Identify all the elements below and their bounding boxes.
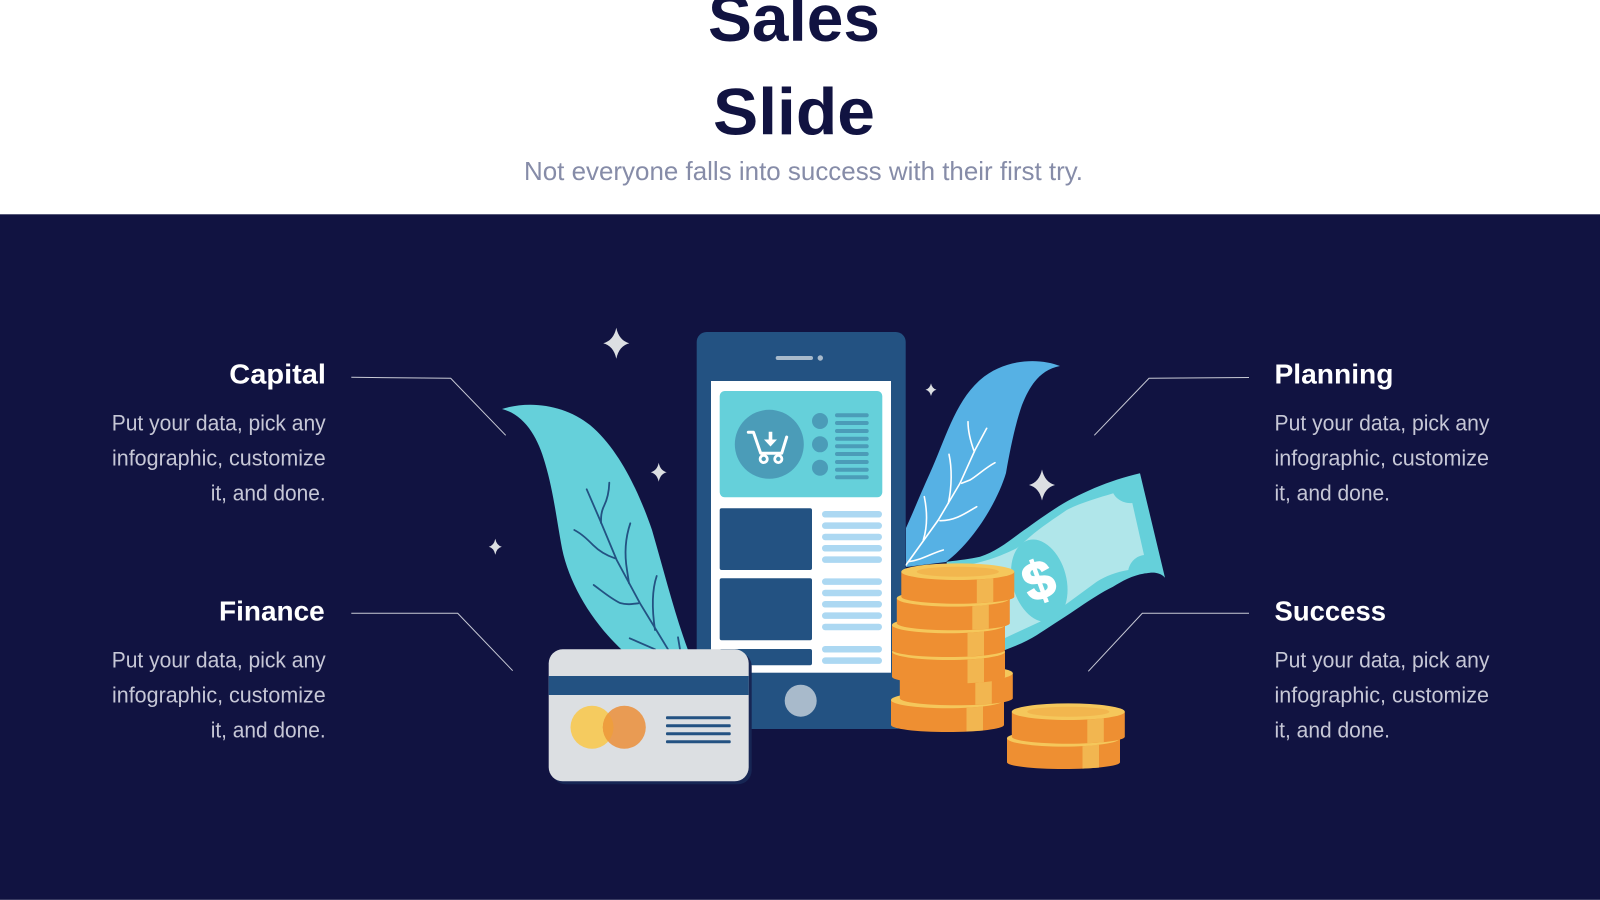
coin 4 (892, 643, 1005, 684)
text block: Planning (1274, 358, 1490, 506)
screen (711, 381, 891, 673)
text block: Success: infographic, customize (1274, 682, 1489, 707)
text block: Planning: Put your data, pick any (1274, 411, 1490, 436)
text block: Finance: Put your data, pick any (112, 647, 326, 672)
icon: large sparkle right (1029, 470, 1055, 500)
icon: shopping cart (748, 432, 787, 463)
bottom edge line (0, 899, 1600, 900)
title: Slide (713, 74, 875, 148)
magnetic stripe (549, 676, 749, 695)
list row 3 (720, 646, 882, 665)
subtitle: Not everyone falls into success with their first try. (524, 156, 1083, 186)
coin 7 (1012, 703, 1125, 744)
text block: Capital: Put your data, pick any (112, 411, 326, 436)
panel: dark background band (0, 214, 1600, 900)
dollar medallion (1002, 533, 1076, 628)
illustration: left teal leaf (502, 405, 688, 650)
speaker (776, 355, 823, 361)
icon: medium sparkle (651, 463, 667, 482)
illustration: smartphone (697, 332, 906, 729)
shopping banner (720, 391, 882, 497)
text block: Planning: it, and done. (1274, 481, 1390, 506)
illustration: main coin stack (891, 563, 1014, 732)
text block: Success: Put your data, pick any (1274, 647, 1490, 672)
text block: Capital (112, 358, 326, 506)
icon: small sparkle left (489, 539, 502, 555)
text block: Finance: it, and done. (211, 717, 326, 742)
text block: Capital: it, and done. (211, 481, 326, 506)
connector: Capital (351, 377, 506, 435)
illustration: banknote (947, 473, 1165, 650)
text block: Success: it, and done. (1274, 717, 1390, 742)
coin 3 (892, 617, 1005, 657)
list row 2 (720, 578, 882, 640)
connector: Finance (351, 613, 513, 671)
text block: Success (1274, 596, 1490, 742)
dollar medallion: $ (1014, 548, 1063, 614)
coin 8 (1007, 730, 1120, 769)
icon: small sparkle right (926, 383, 936, 396)
coin 1 (901, 563, 1014, 604)
phone body (697, 332, 906, 729)
text block: Success: Success (1274, 596, 1386, 627)
card logo (570, 706, 646, 749)
text block: Planning: infographic, customize (1274, 445, 1489, 470)
text block: Planning: Planning (1274, 358, 1394, 389)
text block: Finance: infographic, customize (112, 682, 326, 707)
coin 2 (897, 590, 1010, 630)
text block: Finance (112, 596, 326, 742)
title (708, 0, 880, 148)
home button (785, 685, 817, 717)
list row 1 (720, 508, 882, 570)
illustration: small coin stack (1007, 703, 1125, 769)
icon: large sparkle top left (603, 328, 629, 359)
card text lines (666, 716, 731, 743)
text block: Capital: Capital (229, 358, 326, 389)
text block: Capital: infographic, customize (112, 445, 326, 470)
connector: Planning (1094, 378, 1249, 435)
illustration: credit card (549, 649, 752, 784)
connector: Success (1088, 613, 1249, 671)
coin 6 (891, 692, 1004, 732)
illustration: right blue leaf (906, 361, 1060, 567)
coin 5 (900, 665, 1013, 705)
text block: Finance: Finance (219, 596, 325, 627)
